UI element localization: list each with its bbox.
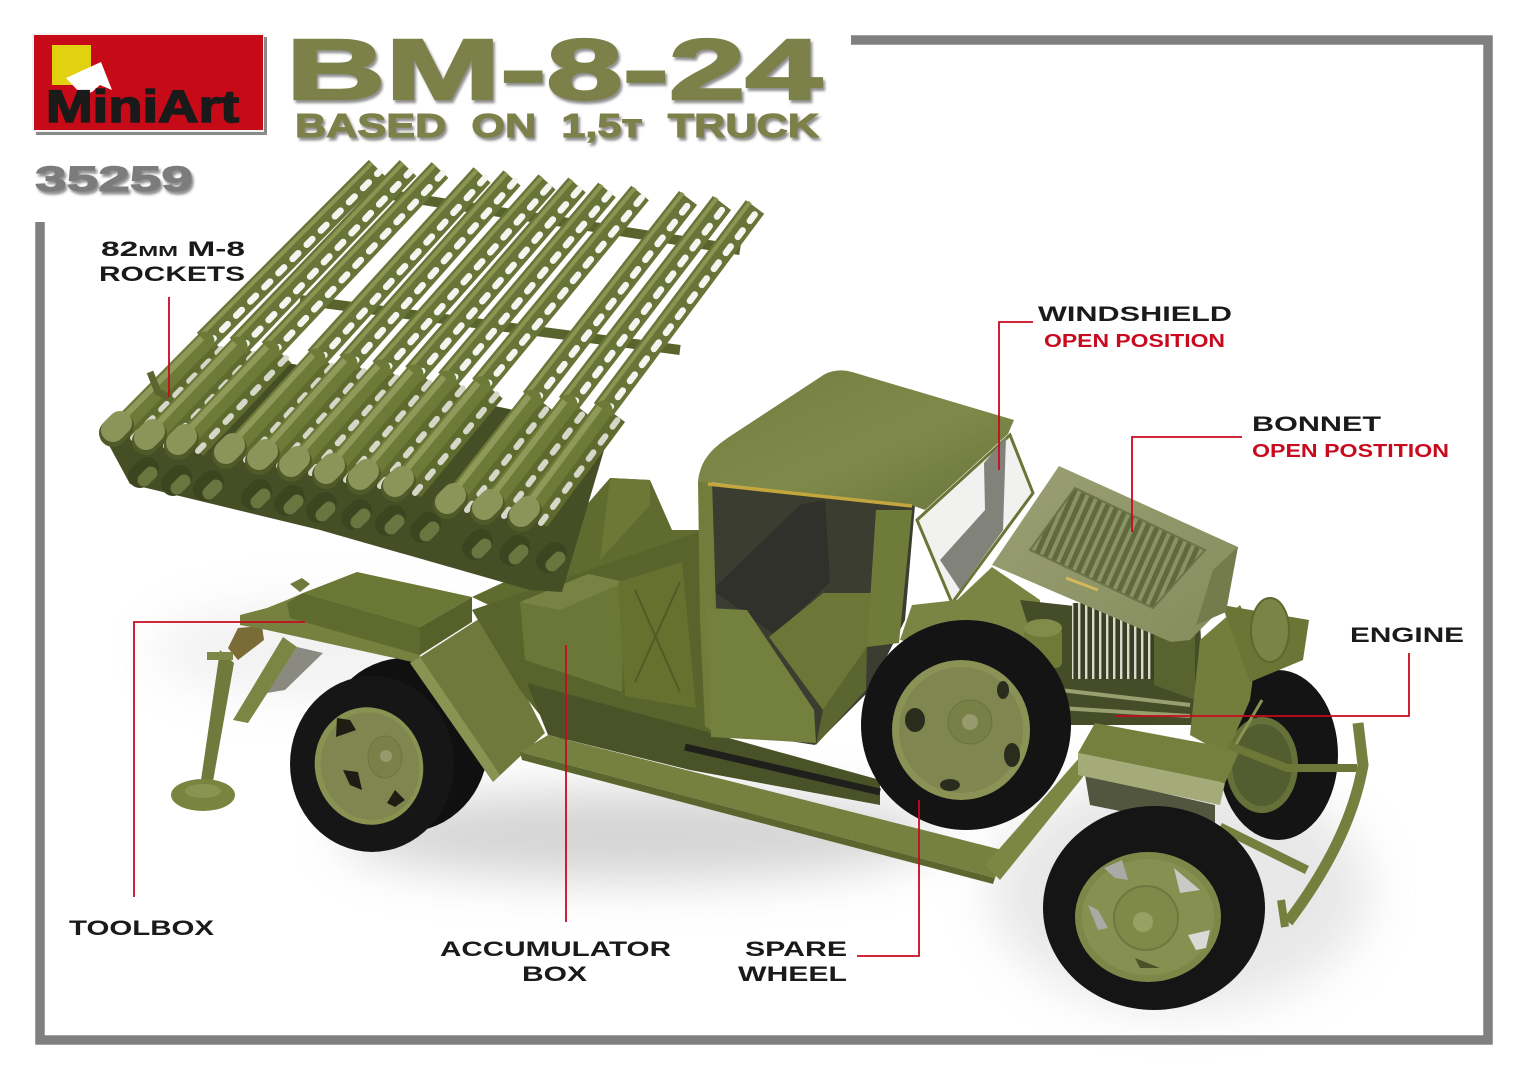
illustration: rear wheel xyxy=(290,658,488,852)
label: engine: ENGINE xyxy=(1350,624,1464,647)
illustration: open bonnet xyxy=(992,466,1238,642)
product number: 35259 xyxy=(35,160,193,199)
label: spare wheel xyxy=(738,938,847,986)
label: accumulator box xyxy=(440,938,671,986)
illustration: centre body xyxy=(472,530,880,805)
label: toolbox: TOOLBOX xyxy=(69,917,214,940)
illustration: spare wheel xyxy=(861,620,1071,830)
label: windshield: WINDSHIELD xyxy=(1038,303,1232,326)
illustration: front wheel xyxy=(1043,806,1265,1010)
label: spare wheel: WHEEL xyxy=(738,963,847,986)
label: rockets: 82 MM M-8 xyxy=(101,238,246,261)
title: BM-8-24: BM-8-24 xyxy=(286,22,822,118)
label: rockets xyxy=(99,238,246,286)
floor shadows xyxy=(150,600,1370,1010)
logo: MiniArt: MiniArt xyxy=(46,81,239,132)
label: spare wheel: SPARE xyxy=(745,938,847,961)
illustration: windshield xyxy=(900,435,1040,665)
label: accumulator box: BOX xyxy=(522,963,587,986)
illustration: running board and exhaust xyxy=(520,735,1083,884)
illustration: launcher support xyxy=(472,478,705,620)
illustration: cab xyxy=(698,370,1014,745)
illustration: front grille and headlight xyxy=(1190,598,1309,780)
illustration: far front wheel xyxy=(1218,670,1338,840)
label: rockets: ROCKETS xyxy=(99,263,245,286)
illustration: front bumper xyxy=(1220,723,1363,927)
illustration: stabiliser jack xyxy=(171,626,264,811)
label: bonnet xyxy=(1252,413,1449,461)
illustration: rear body xyxy=(233,572,545,782)
label: bonnet: BONNET xyxy=(1252,413,1381,436)
label: windshield xyxy=(1038,303,1232,351)
label: accumulator box: ACCUMULATOR xyxy=(440,938,671,961)
illustration: rocket launcher rails xyxy=(104,163,758,592)
illustration: engine bay xyxy=(1020,600,1205,725)
illustration: cab roof xyxy=(698,370,1014,510)
label: bonnet: OPEN POSTITION xyxy=(1252,441,1449,461)
logo: MiniArt xyxy=(32,33,267,135)
subtitle: BASED ON 1,5т TRUCK xyxy=(295,107,819,144)
label: windshield: OPEN POSITION xyxy=(1044,331,1225,351)
leader lines xyxy=(134,297,1409,956)
illustration: front box xyxy=(1078,723,1240,830)
